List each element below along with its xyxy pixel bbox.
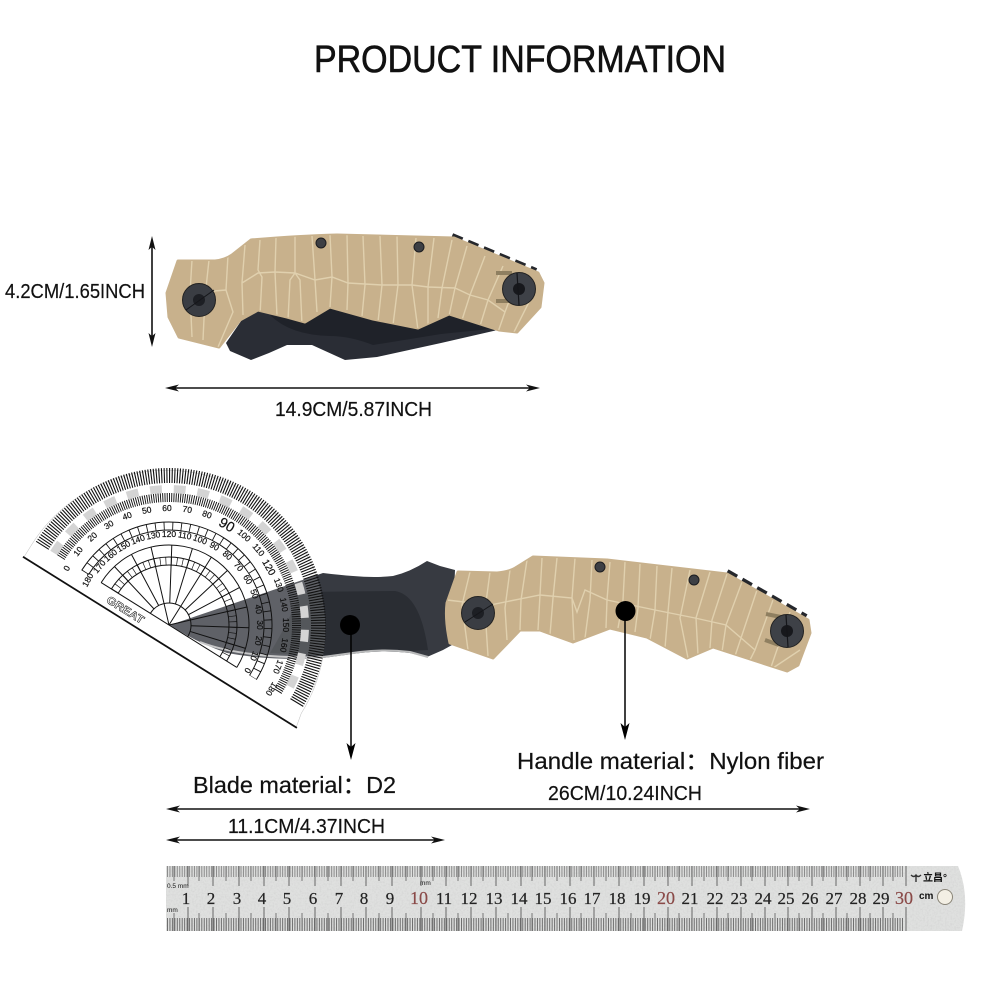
- protractor inner degree labels: 120: [162, 529, 176, 539]
- protractor outer degree labels: 90: [216, 514, 238, 535]
- protractor brand mark: GREAT: [104, 594, 146, 627]
- protractor outer degree labels: 20: [85, 530, 99, 544]
- ruler centimetre numbers: 6: [309, 889, 317, 908]
- height dimension arrow: [148, 236, 156, 347]
- ruler small unit labels: 0.5 mm: [167, 883, 189, 890]
- blade length label: 11.1CM/4.37INCH: [228, 815, 385, 838]
- open knife left pivot screw: [462, 596, 494, 630]
- protractor inner degree labels: 100: [192, 532, 209, 547]
- protractor inner degree labels: 130: [145, 529, 161, 542]
- ruler centimetre numbers: 14: [510, 889, 528, 908]
- ruler centimetre numbers: 17: [584, 889, 601, 908]
- protractor scale: [23, 410, 389, 728]
- protractor outer degree labels: 160: [278, 637, 290, 653]
- protractor inner degree labels: 170: [91, 558, 108, 575]
- ruler hanging hole: [938, 890, 952, 904]
- length dimension arrow: [165, 384, 540, 392]
- protractor outer degree labels: 60: [162, 503, 172, 513]
- protractor inner degree labels: 180: [80, 571, 96, 589]
- protractor outer degree labels: 150: [281, 618, 291, 632]
- ruler centimetre numbers: 27: [826, 889, 843, 908]
- ruler centimetre numbers: 18: [608, 889, 626, 908]
- blade material marker and arrow: [340, 615, 360, 760]
- handle material marker and arrow: [616, 601, 636, 740]
- ruler millimetre ticks: [167, 866, 906, 931]
- ruler centimetre numbers: 4: [258, 889, 267, 908]
- folded knife small screws: [316, 238, 424, 252]
- ruler centimetre numbers: 1: [182, 889, 190, 908]
- ruler centimetre numbers: 3: [233, 889, 241, 908]
- protractor outer degree labels: 170: [271, 659, 285, 676]
- folded knife spine teeth: [452, 236, 536, 271]
- protractor outer degree labels: 120: [259, 558, 277, 578]
- ruler centimetre numbers: 19: [634, 889, 650, 908]
- open knife: [170, 557, 810, 671]
- ruler centimetre numbers: 16: [560, 889, 576, 908]
- height dimension label: 4.2CM/1.65INCH: [5, 280, 145, 303]
- ruler centimetre numbers: 13: [486, 889, 502, 908]
- ruler centimetre numbers: 23: [730, 889, 748, 908]
- ruler centimetre numbers: 5: [283, 889, 291, 908]
- protractor outer degree labels: 100: [236, 527, 253, 544]
- protractor inner degree labels: 140: [130, 532, 147, 547]
- ruler centimetre numbers: 7: [335, 889, 344, 908]
- ruler centimetre numbers: 30: [895, 888, 913, 908]
- ruler centimetre numbers: 11: [436, 889, 452, 908]
- ruler small unit labels: mm: [420, 880, 431, 887]
- open knife small screws: [595, 562, 699, 585]
- protractor inner degree labels: 30: [255, 620, 265, 630]
- protractor outer degree labels: 110: [250, 541, 267, 558]
- protractor inner degree labels: 90: [208, 539, 221, 553]
- ruler centimetre numbers: 29: [872, 889, 890, 908]
- folded knife left pivot screw: [182, 284, 216, 316]
- ruler centimetre numbers: 25: [778, 889, 794, 908]
- folded knife handle: [167, 235, 543, 347]
- total length arrow: [166, 806, 810, 812]
- ruler centimetre numbers: 12: [460, 889, 478, 908]
- ruler centimetre numbers: 24: [754, 889, 772, 908]
- ruler centimetre numbers: 28: [850, 889, 866, 908]
- ruler small unit labels: mm: [167, 907, 178, 914]
- folded knife: [167, 235, 543, 360]
- ruler small unit labels: cm: [919, 891, 934, 902]
- protractor inner degree labels: 20: [253, 635, 264, 647]
- folded knife blade: [226, 302, 502, 360]
- protractor outer degree labels: 130: [272, 577, 286, 594]
- ruler centimetre numbers: 22: [706, 889, 724, 908]
- ruler centimetre numbers: 20: [657, 888, 675, 908]
- length dimension label: 14.9CM/5.87INCH: [275, 398, 432, 421]
- protractor inner degree labels: 60: [241, 573, 255, 586]
- protractor outer degree labels: 10: [71, 544, 85, 558]
- ruler centimetre numbers: 21: [682, 889, 698, 908]
- ruler centimetre numbers: 9: [386, 889, 394, 908]
- protractor outer degree labels: 30: [102, 518, 116, 531]
- protractor inner degree labels: 110: [177, 529, 193, 542]
- open knife right screw with pins: [765, 614, 804, 648]
- protractor inner degree labels: 70: [232, 560, 246, 574]
- total length label: 26CM/10.24INCH: [548, 782, 702, 805]
- ruler body: [166, 866, 965, 931]
- open knife spine teeth: [727, 572, 806, 617]
- protractor outer degree labels: 80: [201, 508, 213, 521]
- handle material label: Handle material：Nylon fiber: [517, 748, 824, 774]
- protractor inner degree labels: 0: [242, 666, 253, 675]
- protractor outer degree labels: 40: [121, 509, 134, 522]
- ruler centimetre numbers: 10: [410, 888, 428, 908]
- blade length arrow: [166, 836, 445, 844]
- protractor inner degree labels: 160: [102, 547, 119, 564]
- protractor outer degree labels: 180: [263, 680, 280, 698]
- open knife handle: [446, 557, 810, 671]
- ruler centimetre numbers: 8: [360, 889, 368, 908]
- protractor outer degree labels: 50: [141, 504, 153, 516]
- ruler centimetre numbers: [182, 888, 913, 908]
- protractor outer degree labels: 0: [61, 564, 72, 573]
- ruler centimetre numbers: 15: [534, 889, 552, 908]
- protractor outer degree labels: 140: [278, 597, 290, 613]
- protractor inner degree labels: 50: [248, 588, 261, 600]
- blade material label: Blade material：D2: [193, 772, 396, 798]
- ruler small unit labels: [167, 880, 934, 914]
- protractor inner degree labels: 10: [248, 650, 261, 663]
- protractor paper: [24, 410, 388, 727]
- protractor outer degree labels: [61, 455, 342, 699]
- ruler brand icon: [911, 875, 921, 882]
- ruler centimetre numbers: 26: [802, 889, 818, 908]
- ruler steel texture: [166, 866, 965, 931]
- folded knife right screw with pins: [496, 272, 536, 306]
- protractor outer degree labels: 70: [182, 504, 193, 515]
- protractor inner degree labels: 40: [253, 604, 264, 615]
- protractor inner degree labels: 150: [115, 538, 132, 554]
- title: PRODUCT INFORMATION: [314, 39, 726, 81]
- protractor inner degree labels: [79, 491, 301, 686]
- steel ruler: [166, 866, 965, 931]
- protractor inner degree labels: 80: [221, 548, 235, 562]
- open knife blade: [170, 561, 455, 659]
- ruler centimetre numbers: 2: [207, 889, 215, 908]
- ruler brand mark: 立昌°: [923, 871, 947, 884]
